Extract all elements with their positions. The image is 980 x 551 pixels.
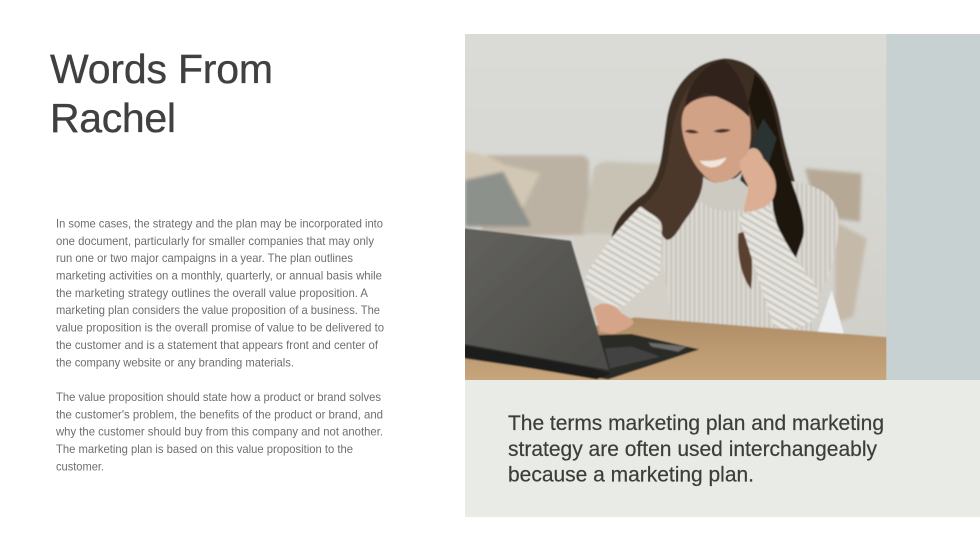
body text: customer. [56,459,104,473]
hair right side [748,73,804,260]
quote text: because a marketing plan. [508,464,754,486]
sweater body [642,177,839,332]
body text: The value proposition should state how a product or brand solves [56,390,381,404]
body text: The marketing plan is based on this value proposition to the [56,442,353,456]
hair front left [642,80,703,240]
panel: blue-grey side block [886,34,980,380]
quote text: strategy are often used interchangeably [508,438,878,461]
quote text [508,412,884,486]
sweater arm left [586,207,662,308]
title: Words From [50,46,273,92]
panel: quote background [465,380,980,517]
table [465,316,886,380]
hair strand over sweater [738,230,752,289]
body text: run one or two major campaigns in a year. The plan outlines [56,251,353,265]
body text: In some cases, the strategy and the plan may be incorporated into [56,216,383,230]
body text: marketing plan considers the value proposition of a business. The [56,303,380,317]
body text: the customer and is a statement that appears front and center of [56,338,379,352]
phone [740,118,777,197]
body text: value proposition is the overall promise of value to be delivered to [56,321,384,335]
body text: marketing activities on a monthly, quarterly, or annual basis while [56,268,382,282]
title [50,46,273,141]
wall [465,34,886,338]
body text [55,216,384,473]
eyes [684,129,731,133]
hand on keyboard [593,304,634,334]
smile [699,157,727,167]
hair parting [685,59,749,117]
body text: why the customer should buy from this company and not another. [55,425,383,439]
body text: the customer's problem, the benefits of the product or brand, and [56,407,383,421]
body text: the company website or any branding materials. [56,355,294,369]
face [682,96,751,183]
body text: one document, particularly for smaller companies that may only [56,234,374,248]
sofa [465,152,867,323]
white chair [817,290,844,335]
sweater arm right [738,207,818,329]
photo: woman on phone at laptop [465,34,886,380]
laptop keyboard base [452,334,699,379]
title: Rachel [50,95,176,141]
body text: the marketing strategy outlines the overall value proposition. A [56,286,368,300]
hair back [611,58,796,238]
laptop screen [452,227,609,370]
hand [740,148,776,212]
quote text: The terms marketing plan and marketing [508,412,884,435]
turtleneck [700,172,745,210]
